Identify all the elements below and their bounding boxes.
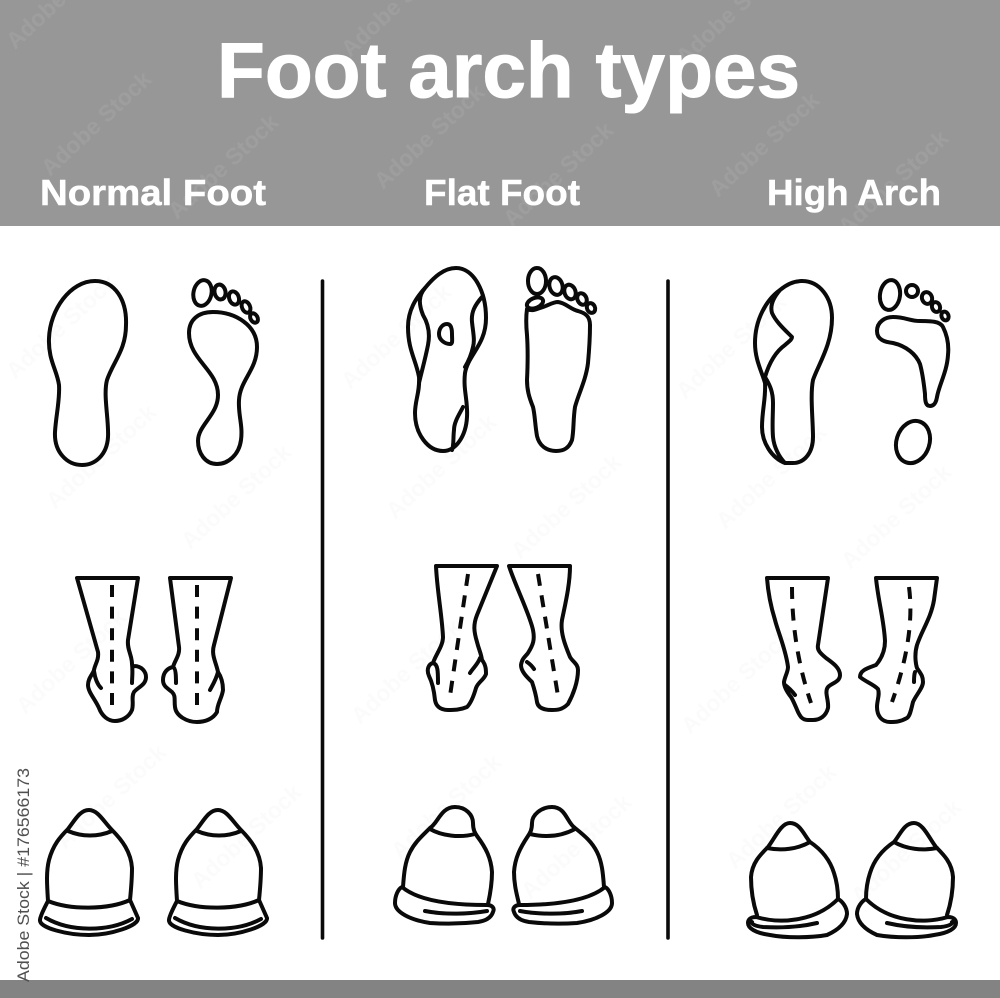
watermark: header area: Adobe Stock: [704, 87, 824, 202]
heading: normal foot: Normal Foot: [40, 172, 266, 213]
icon: flat legs rear view: [428, 566, 578, 710]
divider: flat and high columns: [666, 281, 670, 938]
panel: normal foot: [40, 278, 267, 935]
icon: normal legs rear view: [77, 578, 231, 722]
icon: flat feet front view: [395, 807, 612, 924]
icon: flat insole: [408, 268, 486, 451]
watermark: header area: Adobe Stock: [163, 109, 283, 224]
heading: high arch: High Arch: [767, 172, 941, 213]
bottom band: [0, 980, 1000, 998]
watermark: header area: Adobe Stock: [369, 79, 489, 194]
heading: flat foot: Flat Foot: [424, 172, 580, 213]
icon: high arch legs rear view: [767, 578, 937, 722]
panel: flat foot: [395, 268, 612, 924]
header band: [0, 0, 1000, 226]
icon: flat footprint: [525, 268, 597, 451]
icon: high arch feet front view: [748, 823, 956, 937]
watermark: white area: [1, 269, 966, 909]
icon: normal insole: [49, 281, 126, 465]
watermark: header area: Adobe Stock: [498, 117, 618, 232]
icon: high arch insole: [755, 281, 832, 463]
title: Foot arch types: [217, 26, 800, 114]
icon: normal feet front view: [40, 810, 267, 935]
panel: high arch: [748, 279, 956, 937]
icon: normal footprint: [189, 278, 260, 464]
watermark: header area: [1, 0, 953, 240]
watermark: header area: Adobe Stock: [36, 66, 156, 181]
icon: high arch footprint: [877, 279, 950, 468]
divider: normal and flat columns: [321, 281, 324, 938]
watermark: header area: Adobe Stock: [833, 125, 953, 240]
vertical stock credit: Adobe Stock | #176566173: [14, 768, 33, 982]
